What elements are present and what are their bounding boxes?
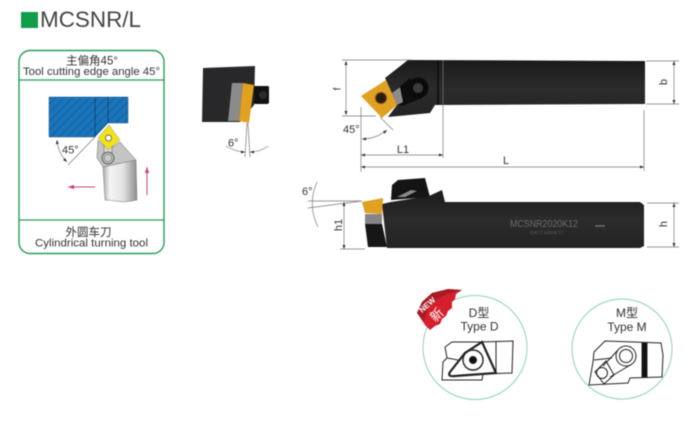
dimension L1: [361, 60, 443, 158]
new badge: [417, 289, 462, 330]
workpiece block: [49, 97, 128, 137]
type M circle: M型: [616, 306, 638, 320]
angle 6: [302, 182, 362, 227]
type M circle: Type M: [607, 320, 647, 334]
angle 6: 6°: [302, 186, 313, 198]
type D circle: D型: [469, 306, 489, 320]
insert: [362, 198, 383, 214]
side view dimensions: [302, 182, 679, 249]
insert: [98, 125, 120, 150]
dimension h: [647, 203, 679, 247]
side view of tool: [362, 178, 644, 248]
panel: tool cutting edge angle: [19, 50, 164, 254]
feed arrow left: [68, 186, 95, 188]
clamp: [392, 78, 428, 106]
type D schematic: [442, 341, 513, 380]
panel heading: [23, 54, 160, 78]
tool holder diagram: [97, 125, 137, 202]
engraved model number: CK□□1204□□: [530, 230, 563, 235]
panel footer: 外圆车刀: [66, 225, 112, 239]
top view dimensions: [332, 60, 679, 172]
feed arrow up: [146, 167, 148, 195]
engraved model number: [510, 219, 605, 235]
panel footer: [35, 225, 148, 250]
dimension L1: L1: [397, 144, 409, 156]
angle 45 annotation: 45°: [62, 144, 79, 156]
new badge: 新: [427, 305, 447, 325]
angle 45 annotation: [57, 137, 95, 165]
type D circle: Type D: [460, 320, 499, 334]
angle 45: 45°: [343, 124, 360, 136]
title: MCSNR/L: [40, 7, 141, 32]
panel footer: Cylindrical turning tool: [35, 238, 148, 250]
new badge: NEW: [417, 295, 438, 315]
top view of tool: [361, 60, 645, 118]
dimension b: b: [658, 79, 670, 85]
panel heading: 主偏角45°: [66, 54, 118, 68]
engraved model number: MCSNR2020K12: [510, 219, 578, 230]
dimension h: h: [658, 221, 670, 227]
dimension b: [646, 61, 679, 104]
angle 45: [343, 107, 393, 172]
dimension f: [332, 60, 412, 116]
type M schematic: [589, 341, 663, 385]
clamp screw: [391, 178, 430, 200]
dimension h1: h1: [333, 219, 345, 231]
6 degree annotation: 6°: [228, 138, 239, 150]
end view of tool: [202, 66, 269, 157]
dimension L: L: [503, 155, 509, 167]
insert: [361, 80, 397, 118]
dimension h1: [333, 202, 365, 249]
dimension f: f: [332, 87, 344, 90]
type D circle: [423, 296, 527, 400]
panel heading: Tool cutting edge angle 45°: [23, 66, 160, 78]
type M circle: [572, 299, 672, 399]
